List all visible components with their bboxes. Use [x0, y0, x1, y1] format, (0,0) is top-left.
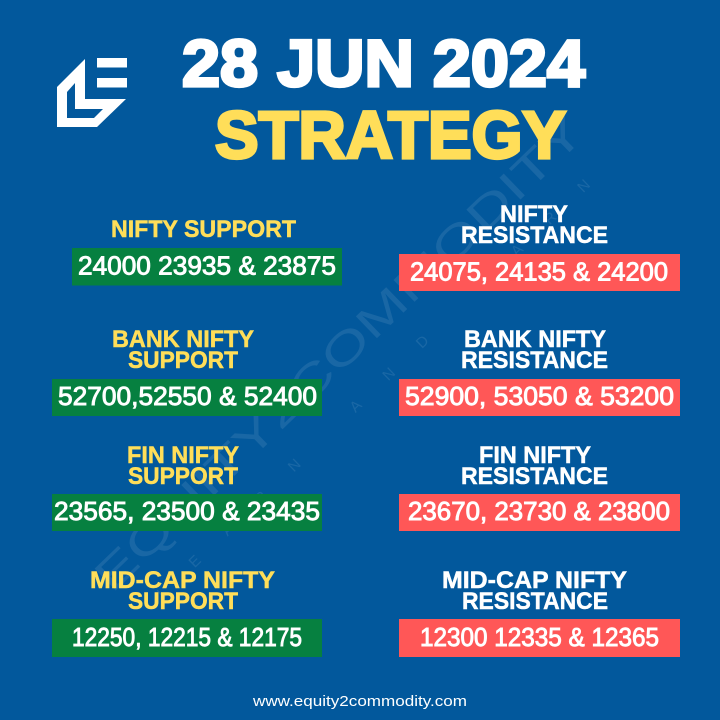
title: date: 28 JUN 2024 — [182, 26, 585, 100]
panel: mid-cap nifty resistance: MID-CAP NIFTY — [442, 567, 627, 594]
panel: nifty resistance: RESISTANCE — [461, 222, 608, 249]
panel: nifty resistance — [399, 201, 680, 291]
panel: bank nifty resistance — [399, 326, 680, 416]
panel: mid-cap nifty resistance: 12300 12335 & 12365 — [420, 624, 659, 652]
panel: fin nifty support: 23565, 23500 & 23435 — [54, 498, 320, 526]
panel: mid-cap nifty support: 12250, 12215 & 12175 — [72, 624, 302, 652]
panel: bank nifty support: 52700,52550 & 52400 — [58, 383, 317, 411]
panel: fin nifty resistance: RESISTANCE — [461, 463, 608, 490]
title: strategy: STRATEGY — [215, 98, 566, 173]
panel: mid-cap nifty support — [52, 567, 322, 657]
panel: nifty resistance: 24075, 24135 & 24200 — [410, 258, 668, 286]
panel: fin nifty support: FIN NIFTY — [127, 442, 239, 469]
watermark: EQUITY2COMMODITY — [85, 107, 594, 601]
panel: bank nifty support — [52, 326, 322, 416]
panel: bank nifty support: SUPPORT — [128, 347, 238, 374]
panel: mid-cap nifty resistance: RESISTANCE — [462, 588, 608, 615]
panel: mid-cap nifty support: MID-CAP NIFTY — [90, 567, 275, 594]
panel: nifty support: 24000 23935 & 23875 — [78, 252, 336, 280]
panel: fin nifty resistance: FIN NIFTY — [479, 442, 591, 469]
watermark: LEARN AND EARN — [154, 176, 594, 602]
panel: nifty support: NIFTY SUPPORT — [111, 216, 296, 243]
panel: fin nifty support: SUPPORT — [128, 463, 238, 490]
icon: logo — [57, 58, 127, 127]
panel: fin nifty resistance — [399, 442, 680, 531]
panel: bank nifty resistance: 52900, 53050 & 53200 — [405, 383, 674, 411]
panel: nifty support — [72, 216, 342, 286]
panel: mid-cap nifty resistance — [399, 567, 680, 657]
panel: bank nifty resistance: BANK NIFTY — [464, 326, 606, 353]
panel: mid-cap nifty support: SUPPORT — [128, 588, 238, 615]
panel: bank nifty resistance: RESISTANCE — [461, 347, 608, 374]
panel: bank nifty support: BANK NIFTY — [112, 326, 254, 353]
panel: nifty resistance: NIFTY — [500, 201, 568, 228]
footer url: www.equity2commodity.com — [252, 693, 467, 710]
panel: fin nifty support — [52, 442, 322, 531]
panel: fin nifty resistance: 23670, 23730 & 23800 — [408, 498, 670, 526]
